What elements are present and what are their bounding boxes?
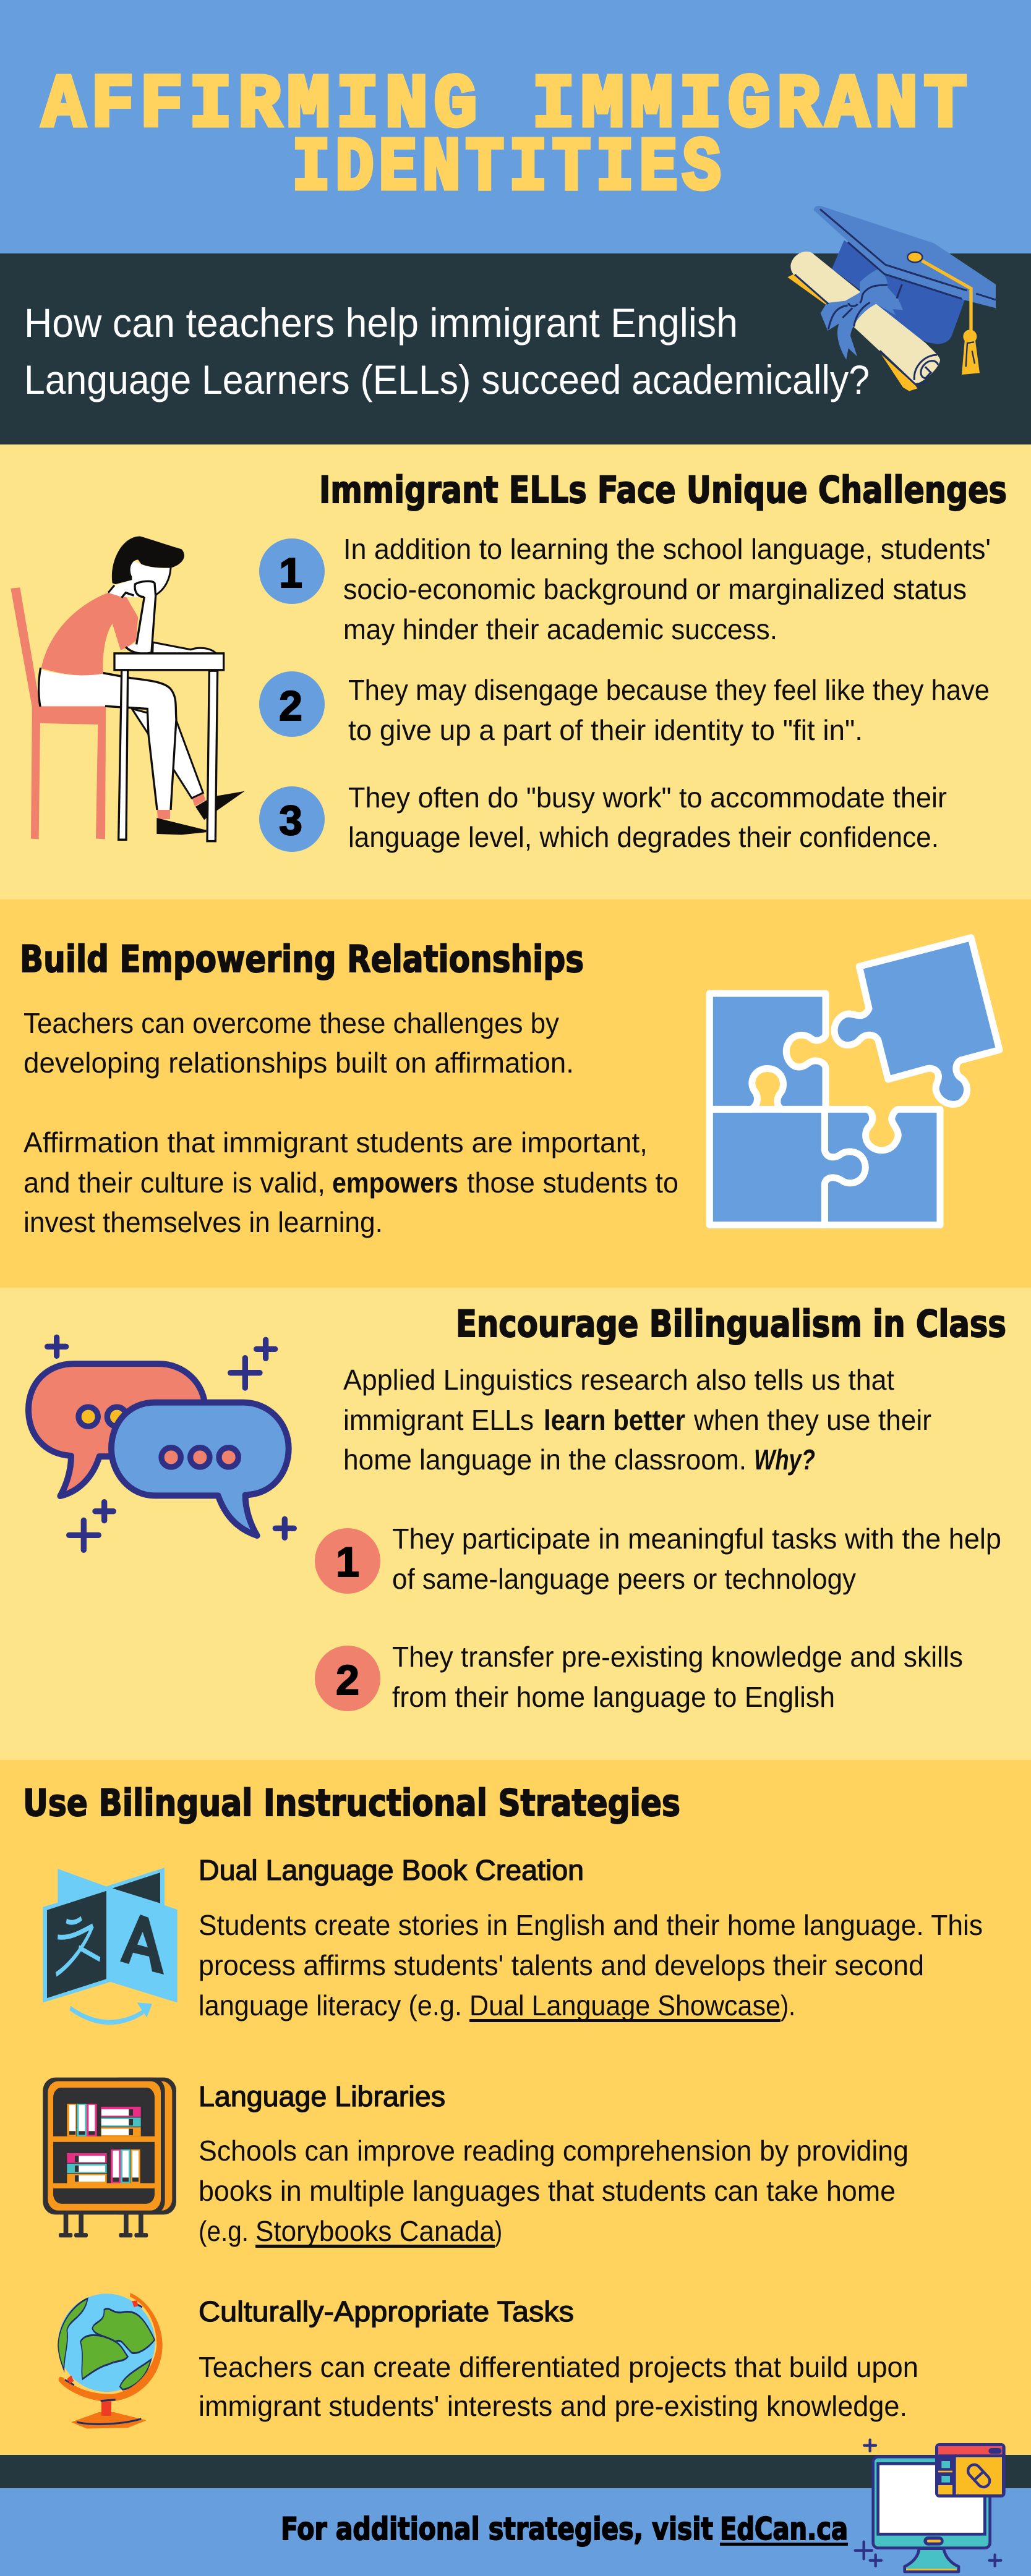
strategy: language libraries: (e.g. bbox=[199, 2215, 249, 2247]
icon: globe bbox=[58, 2293, 163, 2428]
panel: immigrant ELLs face unique challenges bbox=[0, 444, 1031, 899]
question text: Language Learners (ELLs) succeed academically? bbox=[24, 357, 870, 402]
text block: affirmation bbox=[24, 1126, 678, 1238]
numbered point 1: socio-economic background or marginalized status bbox=[343, 573, 967, 605]
text block: relationships: Teachers can overcome these challenges by bbox=[24, 1007, 559, 1039]
title bbox=[42, 62, 967, 211]
strategy: language libraries: Language Libraries bbox=[199, 2080, 445, 2112]
strategy: language libraries: books in multiple languages that students can take home bbox=[199, 2175, 896, 2207]
text block: affirmation: invest themselves in learning. bbox=[24, 1206, 383, 1238]
icon: computer with app window bbox=[855, 2440, 1004, 2572]
numbered point 3: 3 bbox=[279, 797, 302, 844]
panel: build empowering relationships bbox=[0, 899, 1031, 1288]
text block: affirmation: those students to bbox=[467, 1167, 678, 1199]
title: IDENTITIES bbox=[292, 126, 721, 211]
strategy: language libraries bbox=[199, 2080, 909, 2248]
numbered point 3 bbox=[259, 781, 947, 853]
numbered reason 2: from their home language to English bbox=[392, 1681, 835, 1713]
text block: research: Applied Linguistics research also tells us that bbox=[343, 1364, 894, 1396]
question text bbox=[24, 300, 870, 402]
icon: graduation cap and diploma bbox=[787, 206, 996, 391]
text block: affirmation: and their culture is valid, bbox=[24, 1167, 325, 1199]
call to action: For additional strategies, visit bbox=[281, 2511, 713, 2547]
title: AFFIRMING IMMIGRANT bbox=[42, 62, 967, 148]
text block: relationships bbox=[24, 1007, 574, 1079]
strategy: language libraries: Storybooks Canada bbox=[255, 2215, 495, 2247]
text block: research: when they use their bbox=[693, 1404, 931, 1436]
numbered point 2 bbox=[259, 671, 990, 746]
panel: use bilingual instructional strategies bbox=[0, 1760, 1031, 2455]
numbered reason 2: 2 bbox=[336, 1657, 359, 1704]
strategy: dual language book creation: Dual Language Book Creation bbox=[199, 1854, 584, 1886]
heading: Use Bilingual Instructional Strategies bbox=[23, 1782, 680, 1825]
call to action: EdCan.ca bbox=[720, 2511, 848, 2547]
numbered point 1: In addition to learning the school language, students' bbox=[343, 533, 991, 565]
strategy: dual language book creation: process affirms students' talents and develops their second bbox=[199, 1949, 924, 1981]
numbered point 3: language level, which degrades their confidence. bbox=[348, 821, 939, 853]
numbered reason 1 bbox=[315, 1523, 1001, 1595]
strategy: dual language book creation: ). bbox=[781, 1989, 795, 2021]
text block: research: Why? bbox=[754, 1443, 815, 1476]
icon: speech bubbles bbox=[28, 1337, 294, 1550]
strategy: dual language book creation: Students create stories in English and their home language. This bbox=[199, 1909, 983, 1941]
numbered reason 1: of same-language peers or technology bbox=[392, 1563, 856, 1595]
text block: research: learn better bbox=[544, 1404, 685, 1436]
numbered point 2: 2 bbox=[279, 682, 302, 729]
numbered point 2: They may disengage because they feel like they have bbox=[348, 674, 990, 706]
icon: bookshelf bbox=[43, 2078, 176, 2237]
numbered reason 1: They participate in meaningful tasks with the help bbox=[392, 1523, 1001, 1555]
numbered point 1 bbox=[259, 533, 991, 645]
strategy: language libraries: ) bbox=[495, 2215, 502, 2247]
text block: research: immigrant ELLs bbox=[343, 1404, 534, 1436]
strategy: culturally-appropriate tasks: Culturally-Appropriate Tasks bbox=[199, 2295, 574, 2327]
text block: research bbox=[343, 1364, 931, 1476]
icon: student at desk bbox=[11, 537, 245, 841]
icon: translation book bbox=[43, 1868, 178, 2022]
numbered reason 2: They transfer pre-existing knowledge and skills bbox=[392, 1641, 963, 1673]
text block: research: home language in the classroom. bbox=[343, 1443, 747, 1476]
strategy: culturally-appropriate tasks: Teachers can create differentiated projects that build upon bbox=[199, 2351, 918, 2383]
panel: title banner bbox=[0, 0, 1031, 253]
question text: How can teachers help immigrant English bbox=[24, 300, 738, 346]
strategy: dual language book creation bbox=[199, 1854, 983, 2022]
numbered point 1: may hinder their academic success. bbox=[343, 613, 777, 645]
strategy: culturally-appropriate tasks bbox=[199, 2295, 918, 2422]
strategy: culturally-appropriate tasks: immigrant students' interests and pre-existing knowledge. bbox=[199, 2390, 907, 2422]
text block: affirmation: Affirmation that immigrant students are important, bbox=[24, 1126, 648, 1158]
panel: encourage bilingualism in class bbox=[0, 1288, 1031, 1760]
strategy: dual language book creation: Dual Language Showcase bbox=[469, 1989, 781, 2021]
numbered point 1: 1 bbox=[279, 550, 302, 597]
panel: footer bbox=[0, 2440, 1031, 2576]
strategy: language libraries: Schools can improve reading comprehension by providing bbox=[199, 2135, 909, 2167]
panel: guiding question bbox=[0, 206, 1031, 444]
icon: puzzle pieces bbox=[709, 938, 999, 1225]
numbered point 2: to give up a part of their identity to "fit in". bbox=[348, 714, 863, 746]
text block: relationships: developing relationships built on affirmation. bbox=[24, 1047, 574, 1079]
heading: Build Empowering Relationships bbox=[20, 938, 584, 981]
numbered reason 1: 1 bbox=[336, 1539, 359, 1586]
text block: affirmation: empowers bbox=[332, 1167, 458, 1199]
numbered point 3: They often do "busy work" to accommodate their bbox=[348, 781, 947, 814]
strategy: dual language book creation: language literacy (e.g. bbox=[199, 1989, 462, 2021]
numbered reason 2 bbox=[315, 1641, 963, 1713]
